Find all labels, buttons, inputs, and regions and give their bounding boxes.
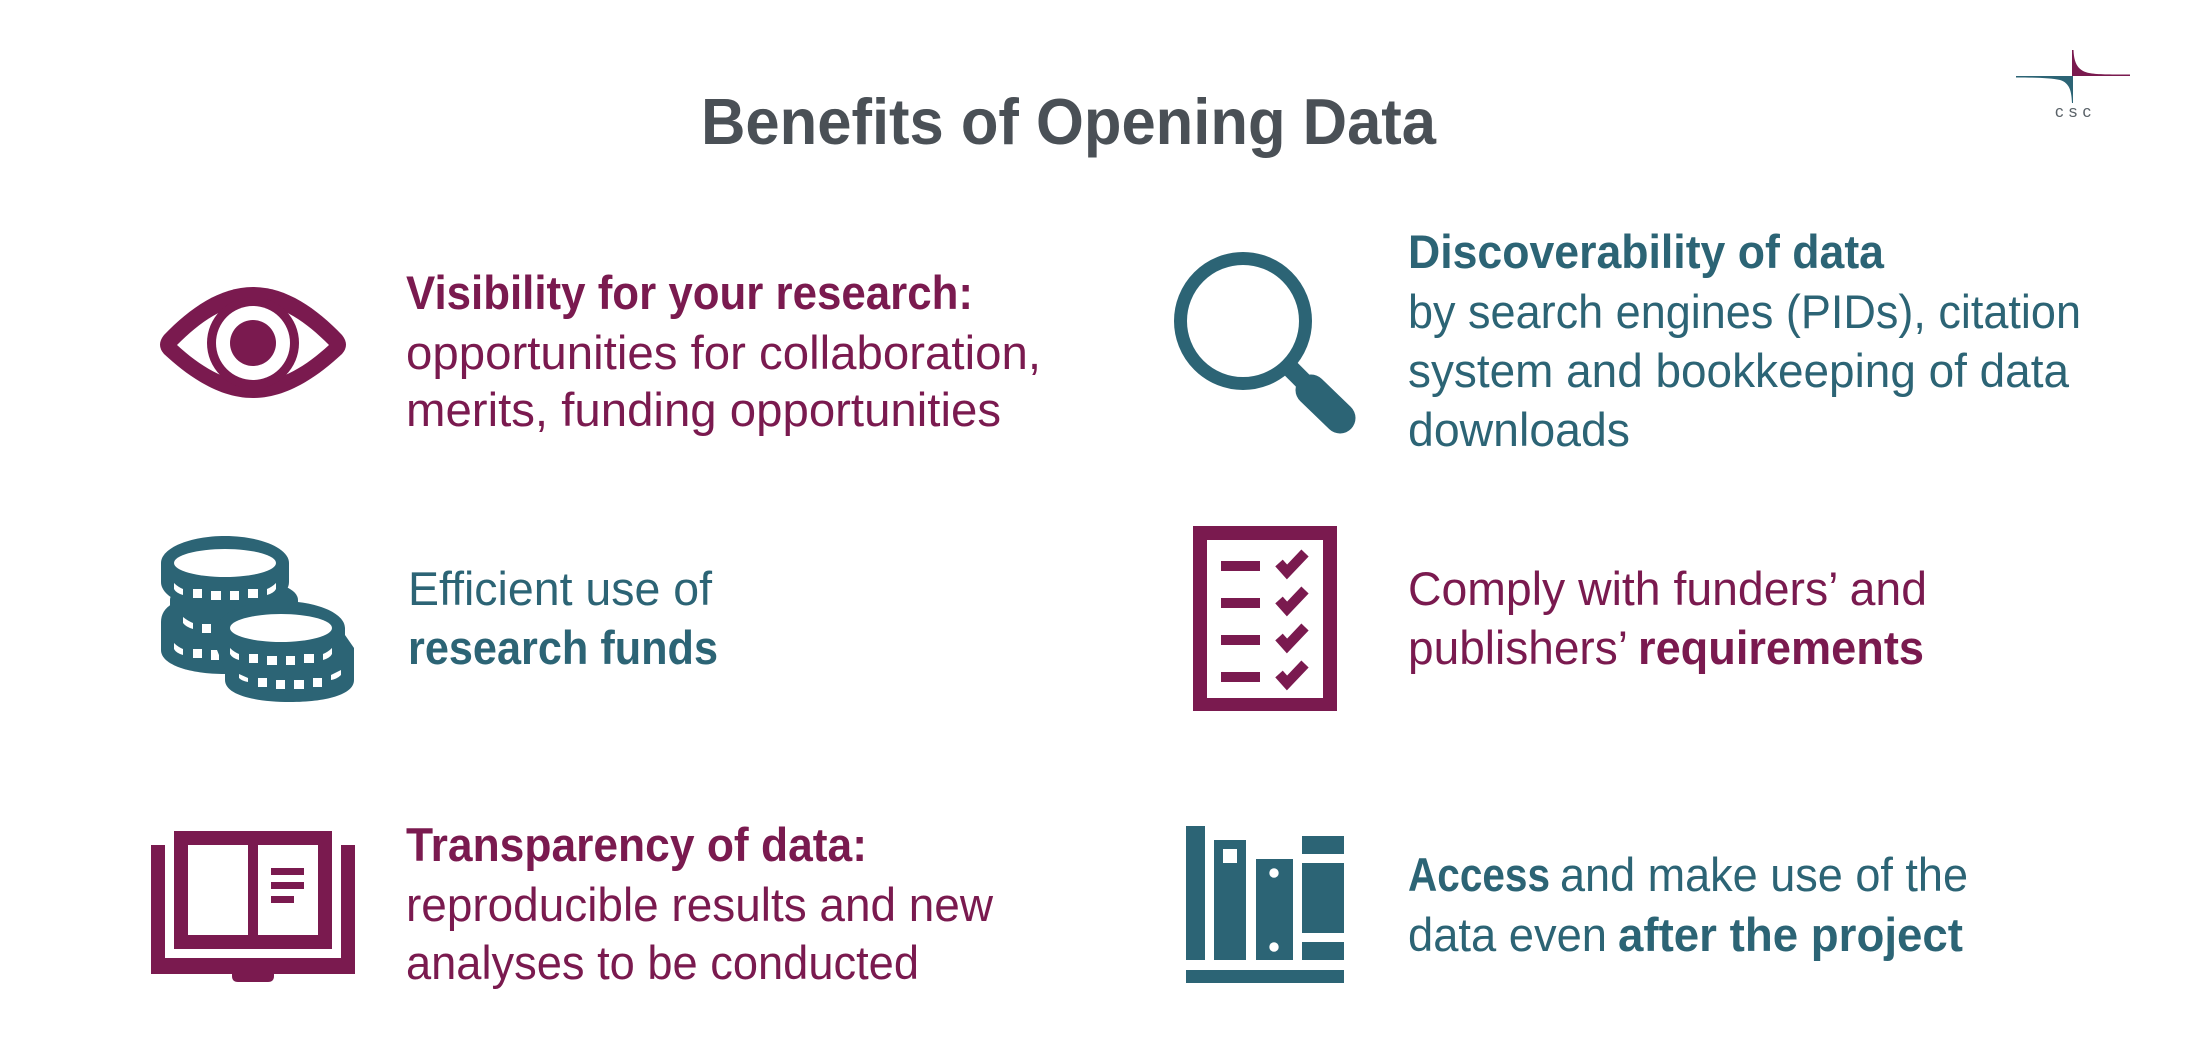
text: transparency: analyses to be conducted bbox=[406, 936, 919, 989]
text: visibility: merits, funding opportunities bbox=[406, 383, 1001, 436]
panel: visibility bbox=[160, 266, 1041, 436]
title: Benefits of Opening Data bbox=[701, 85, 1437, 158]
panel: research funds bbox=[161, 536, 718, 702]
text: access: Access bbox=[1408, 848, 1550, 901]
text: visibility: Visibility for your research: bbox=[406, 266, 973, 319]
icon: open book bbox=[151, 831, 355, 982]
icon: books on shelf bbox=[1186, 826, 1344, 983]
text: access: data even bbox=[1408, 908, 1607, 961]
text: access bbox=[1408, 848, 1968, 961]
text: research funds bbox=[408, 562, 718, 674]
text: requirements: Comply with funders’ and bbox=[1408, 562, 1927, 615]
icon: checklist bbox=[1193, 526, 1337, 711]
panel: access bbox=[1186, 826, 1968, 983]
text: transparency bbox=[406, 818, 994, 989]
text: discoverability: system and bookkeeping of data bbox=[1408, 344, 2070, 397]
icon: magnifying glass bbox=[1180, 258, 1340, 418]
icon: eye bbox=[160, 287, 346, 398]
text: requirements: publishers’ bbox=[1408, 621, 1628, 674]
text: requirements: requirements bbox=[1638, 621, 1924, 674]
text: transparency: Transparency of data: bbox=[406, 818, 867, 871]
icon: coins bbox=[161, 536, 354, 702]
panel: discoverability bbox=[1180, 225, 2081, 456]
text: access: after the project bbox=[1618, 908, 1963, 961]
text: discoverability bbox=[1408, 225, 2081, 456]
logo: CSC: csc bbox=[2055, 102, 2092, 121]
panel: requirements bbox=[1193, 526, 1927, 711]
text: discoverability: downloads bbox=[1408, 403, 1630, 456]
text: transparency: reproducible results and new bbox=[406, 878, 994, 931]
text: research funds: Efficient use of bbox=[408, 562, 713, 615]
text: discoverability: Discoverability of data bbox=[1408, 225, 1885, 278]
logo: CSC bbox=[2016, 50, 2130, 121]
panel: transparency bbox=[151, 818, 994, 989]
text: discoverability: by search engines (PIDs), citation bbox=[1408, 285, 2081, 338]
text: research funds: research funds bbox=[408, 621, 718, 674]
text: visibility: opportunities for collaboration, bbox=[406, 326, 1041, 379]
text: visibility bbox=[406, 266, 1041, 436]
text: access: and make use of the bbox=[1560, 848, 1968, 901]
text: requirements bbox=[1408, 562, 1927, 674]
